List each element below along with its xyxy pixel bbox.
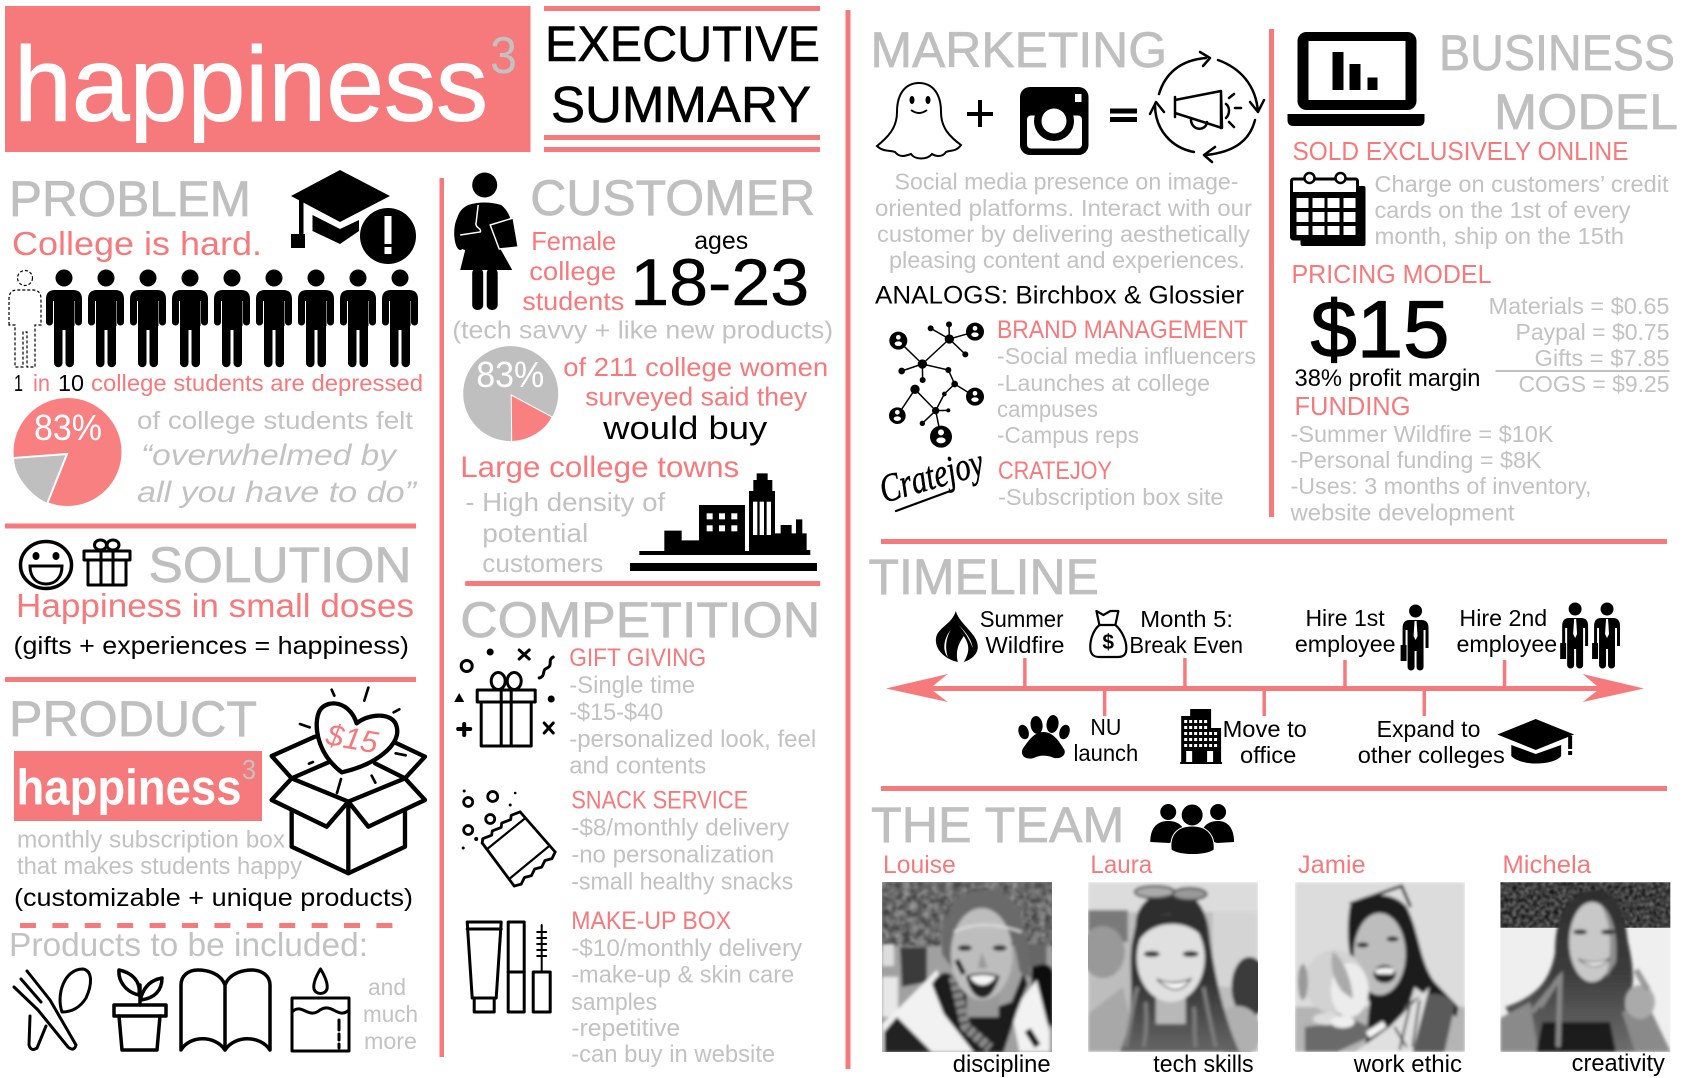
icon: snapchat ghost: [877, 83, 961, 158]
heading: competition: COMPETITION: [460, 592, 820, 648]
milestone: move to office: Move to: [1223, 716, 1307, 742]
survey text: surveyed said they: [585, 382, 807, 412]
panel: competition: [454, 592, 820, 1068]
arrow: timeline axis: [886, 658, 1644, 716]
subheading: funding: FUNDING: [1294, 391, 1410, 421]
cost breakdown: COGS = $9.25: [1518, 371, 1670, 397]
product description: that makes students happy: [17, 853, 302, 880]
title banner: happiness: [14, 26, 488, 144]
statistic: 1 in 10 depressed: 10: [58, 370, 84, 396]
logo: happiness cubed: 3: [242, 754, 256, 785]
milestone: hire second employee: [1456, 605, 1557, 657]
marketing description: oriented platforms. Interact with our: [875, 195, 1252, 221]
icon: graduation cap with alert: [291, 170, 417, 265]
icon: instagram: [1020, 87, 1088, 155]
subheading: sold exclusively online: SOLD EXCLUSIVELY ONLINE: [1292, 136, 1628, 166]
milestone: move to office: office: [1240, 742, 1296, 768]
panel: the team: [871, 797, 1671, 1078]
milestone: nu launch: NU: [1090, 714, 1121, 740]
marketing description: Social media presence on image-: [894, 168, 1238, 194]
panel: product: [9, 688, 425, 1054]
panel: marketing: [870, 22, 1264, 512]
statistic: ages 18-23: 18-23: [630, 245, 809, 319]
quote text: [137, 407, 418, 509]
text: brand management: BRAND MANAGEMENT: [997, 316, 1248, 344]
logo: cratejoy: [874, 439, 989, 512]
text: brand management: campuses: [997, 396, 1098, 422]
text: makeup box: samples: [571, 989, 657, 1016]
statistic: ages 18-23: ages: [694, 227, 748, 255]
milestone: hire first employee: employee: [1295, 631, 1396, 657]
subheading: pricing model: PRICING MODEL: [1292, 259, 1492, 289]
text: brand management: [997, 316, 1256, 448]
text: and much more: [363, 974, 418, 1054]
text: cratejoy: -Subscription box site: [998, 484, 1224, 510]
icon: megaphone in cycle: [1150, 52, 1264, 162]
icon: graduation cap small: [1497, 719, 1574, 764]
text: female college students: college: [529, 256, 616, 286]
cost breakdown: Gifts = $7.85: [1534, 345, 1670, 371]
panel: problem: [9, 170, 423, 509]
survey text: of 211 college women: [563, 352, 828, 382]
text: cratejoy: CRATEJOY: [998, 457, 1112, 485]
milestone: nu launch: launch: [1073, 740, 1138, 766]
statistic: profit margin: 38% profit margin: [1294, 365, 1480, 392]
icon: money bag: $: [1102, 631, 1114, 654]
icon: employee: [1401, 604, 1429, 670]
marketing description: pleasing content and experiences.: [889, 247, 1245, 273]
icon: flame: [936, 611, 978, 662]
pie chart: 83 percent overwhelmed: 83%: [34, 407, 102, 448]
marketing description: customer by delivering aesthetically: [877, 221, 1250, 247]
milestone: summer wildfire: [980, 606, 1065, 658]
milestone: hire second employee: employee: [1456, 631, 1557, 657]
icon: smiley: [20, 542, 72, 588]
text: funding list: -Uses: 3 months of inventory,: [1290, 473, 1592, 499]
team member: michela: [1500, 851, 1671, 1077]
quote text: all you have to do”: [137, 476, 418, 509]
survey text: [563, 352, 828, 446]
panel: solution: [14, 537, 414, 660]
text: billing schedule: [1374, 171, 1669, 249]
heading: product: PRODUCT: [9, 691, 257, 747]
subheading: products included: Products to be included:: [9, 926, 368, 963]
quote text: “overwhelmed by: [141, 439, 398, 472]
statistic: 1 in 10 depressed: 1: [14, 370, 23, 396]
panel: timeline: [869, 549, 1644, 768]
milestone: hire first employee: Hire 1st: [1305, 605, 1385, 631]
heading: executive summary: SUMMARY: [551, 76, 811, 133]
milestone: summer wildfire: Summer: [980, 606, 1064, 632]
text: brand management: -Launches at college: [997, 370, 1210, 396]
subheading: large college towns: Large college towns: [460, 451, 739, 484]
text: gift giving: -Single time: [569, 672, 695, 699]
team member: jamie: work ethic: [1353, 1051, 1462, 1078]
icon: laptop with chart: [1288, 32, 1424, 126]
text: gift giving: and contents: [569, 752, 706, 780]
panel: customer: [452, 170, 833, 586]
milestone: expand to other colleges: other colleges: [1358, 742, 1505, 768]
team member: louise: [882, 851, 1053, 1078]
team member: laura: tech skills: [1153, 1051, 1254, 1078]
heading: problem: PROBLEM: [9, 171, 251, 227]
text: makeup box: [571, 907, 802, 1068]
heading: the team: THE TEAM: [871, 797, 1124, 853]
analogs line: ANALOGS: Birchbox & Glossier: [875, 282, 1244, 310]
icon: team: [1150, 804, 1234, 854]
icon: calendar: [1292, 173, 1366, 246]
product description: monthly subscription box: [17, 826, 285, 854]
icon: paw: [1016, 714, 1072, 759]
text: funding list: [1289, 421, 1592, 526]
milestone: hire first employee: [1295, 605, 1396, 657]
milestone: break even: Break Even: [1129, 632, 1243, 658]
milestone: move to office: [1223, 716, 1307, 768]
team member: louise: discipline: [953, 1051, 1051, 1078]
text: billing schedule: cards on the 1st of every: [1374, 197, 1631, 223]
icon: gift: [84, 540, 130, 585]
text: snack service: SNACK SERVICE: [571, 787, 748, 815]
text: makeup box: -$10/monthly delivery: [571, 935, 802, 962]
statistic: 1 in 10 depressed: in: [33, 370, 50, 396]
icon: office building: [1180, 709, 1222, 764]
team member: michela: Michela: [1502, 851, 1591, 879]
text: gift giving: -$15-$40: [569, 699, 663, 726]
text: gift giving: -personalized look, feel: [569, 726, 816, 753]
text: high density: [465, 487, 666, 578]
note: tech savvy: (tech savvy + like new products): [452, 316, 833, 344]
text: billing schedule: month, ship on the 15th: [1374, 223, 1624, 249]
icon: influencer network: [889, 321, 984, 448]
survey text: would buy: [602, 410, 767, 446]
text: snack service: -small healthy snacks: [571, 868, 793, 896]
text: funding list: website development: [1289, 500, 1515, 526]
title banner: 3: [490, 27, 517, 85]
icon: equals: [1110, 108, 1137, 122]
logo: cratejoy: Cratejoy: [874, 439, 989, 512]
heading: business model: BUSINESS: [1439, 25, 1675, 81]
text: female college students: Female: [531, 226, 616, 256]
text: high density: customers: [482, 548, 603, 578]
milestone: expand to other colleges: [1358, 716, 1505, 768]
text: snack service: -$8/monthly delivery: [571, 814, 789, 842]
text: makeup box: MAKE-UP BOX: [571, 907, 731, 935]
text: snack service: -no personalization: [571, 842, 774, 869]
heading: timeline: TIMELINE: [869, 549, 1099, 605]
heading: business model: MODEL: [1494, 84, 1678, 140]
tagline: Happiness in small doses: [16, 587, 414, 624]
product description: [14, 826, 413, 912]
milestone: hire second employee: Hire 2nd: [1459, 605, 1547, 631]
team member: louise: Louise: [883, 851, 956, 879]
text: cratejoy: [998, 457, 1224, 510]
icon: snack bag: [462, 790, 555, 886]
milestone: nu launch: [1073, 714, 1138, 766]
icon: city skyline: [630, 473, 817, 571]
text: gift giving: [569, 644, 816, 780]
icon: female student: [454, 172, 518, 310]
subheading: college is hard: College is hard.: [12, 225, 262, 262]
team member: jamie: Jamie: [1298, 851, 1366, 879]
text: snack service: [571, 787, 793, 896]
milestone: expand to other colleges: Expand to: [1377, 716, 1480, 742]
text: and much more: much: [363, 1001, 418, 1027]
icon: candle: [292, 969, 349, 1051]
milestone: break even: [1129, 606, 1243, 658]
heading: executive summary: [544, 6, 820, 152]
text: gift giving: GIFT GIVING: [569, 644, 706, 672]
cost breakdown: [1488, 293, 1670, 397]
product description: (customizable + unique products): [14, 884, 413, 912]
team member: jamie: [1295, 851, 1465, 1078]
icon: open box with heart: $15: [323, 718, 382, 760]
team member: laura: Laura: [1090, 851, 1152, 879]
icon: fork and spoon: [14, 969, 91, 1049]
milestone: summer wildfire: Wildfire: [985, 632, 1065, 658]
icon: plus: [967, 100, 993, 127]
heading: executive summary: EXECUTIVE: [545, 16, 820, 72]
icon: gift with confetti: [454, 648, 555, 746]
heading: marketing: MARKETING: [870, 22, 1167, 78]
text: makeup box: -make-up & skin care: [571, 962, 794, 988]
heading: solution: SOLUTION: [148, 537, 412, 593]
text: makeup box: -can buy in website: [571, 1041, 775, 1068]
text: brand management: -Social media influencers: [997, 343, 1256, 369]
text: funding list: -Summer Wildfire = $10K: [1290, 421, 1554, 447]
statistic: 1 in 10 depressed: college students are depressed: [91, 370, 423, 396]
cost breakdown: Materials = $0.65: [1488, 293, 1670, 319]
heading: customer: CUSTOMER: [530, 170, 815, 226]
panel: business model: [1288, 25, 1678, 526]
pictogram: 1 in 10 students: [9, 270, 418, 367]
icon: potted plant: [114, 970, 166, 1050]
text: and much more: more: [364, 1028, 417, 1054]
pie chart: 83 percent would buy: 83%: [476, 354, 544, 395]
text: high density: potential: [482, 518, 588, 548]
icon: open box with heart: [272, 688, 425, 873]
icon: two employees: [1560, 602, 1620, 668]
pie chart: 83 percent overwhelmed: [13, 398, 122, 506]
team member: laura: [1088, 856, 1258, 1072]
equation text: (gifts + experiences = happiness): [14, 632, 409, 660]
text: female college students: students: [522, 286, 624, 316]
milestone: break even: Month 5:: [1140, 606, 1233, 632]
heading: business model: [1439, 25, 1678, 140]
team member: michela: creativity: [1572, 1050, 1665, 1077]
text: brand management: -Campus reps: [997, 422, 1139, 448]
text: makeup box: -repetitive: [571, 1015, 680, 1042]
text: billing schedule: Charge on customers’ credit: [1374, 171, 1669, 197]
statistic: 15 dollars: $15: [1310, 285, 1450, 375]
marketing description: [875, 168, 1252, 273]
text: funding list: -Personal funding = $8K: [1290, 447, 1542, 473]
icon: makeup products: [467, 922, 550, 1012]
text: high density: - High density of: [465, 487, 666, 517]
text: female college students: [522, 226, 624, 316]
cost breakdown: Paypal = $0.75: [1516, 319, 1670, 345]
icon: money bag: [1090, 611, 1126, 657]
quote text: of college students felt: [137, 407, 413, 435]
logo: happiness cubed: happiness: [16, 760, 242, 816]
icon: open book: [181, 970, 270, 1050]
text: and much more: and: [368, 974, 406, 1000]
pie chart: 83 percent would buy: [463, 346, 558, 442]
